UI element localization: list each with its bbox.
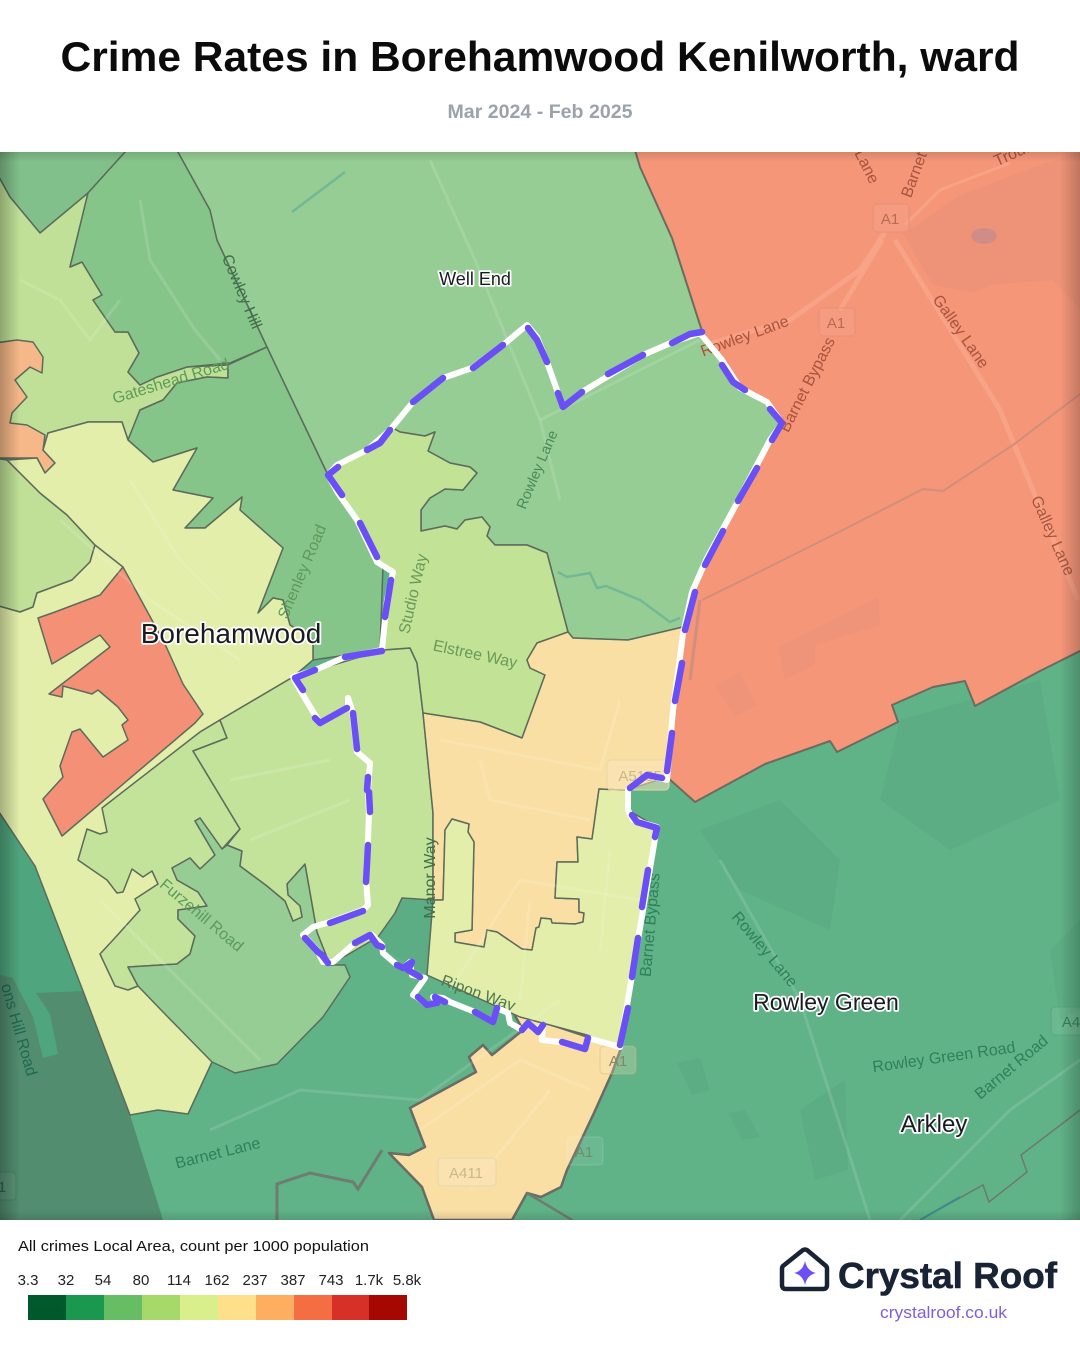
road labels: green areas: Manor Way	[422, 837, 439, 919]
road labels: green areas: Rowley Lane	[728, 909, 801, 991]
legend scale labels: 32	[58, 1272, 74, 1289]
area: Borehamwood light yellow-green	[0, 422, 313, 1115]
road labels: green areas: Barnet Bypass	[638, 872, 664, 978]
detail: district boundary	[920, 1110, 1080, 1220]
legend scale labels	[18, 1272, 422, 1289]
road labels: green areas: Barnet Road	[972, 1032, 1052, 1103]
road labels: green areas: Rowley Green Road	[871, 1039, 1016, 1076]
place labels: Well End	[439, 269, 511, 289]
icon: house with star	[782, 1250, 827, 1289]
area: north-west corner green	[0, 152, 124, 232]
area: Furzehill green	[128, 818, 350, 1073]
area: west mid green strip	[0, 458, 95, 612]
date range subtitle: Mar 2024 - Feb 2025	[448, 102, 633, 123]
place labels: Rowley Green	[753, 989, 899, 1015]
area: east high crime red	[632, 140, 1080, 802]
road labels: green areas: Studio Way	[396, 552, 431, 635]
place labels: Arkley	[901, 1111, 967, 1138]
area: south-west lowest crime	[0, 975, 163, 1220]
road labels: red area: Barnet Bypass	[777, 335, 839, 435]
road labels: red area: Lane	[851, 147, 882, 187]
road labels: green areas: Gateshead Road	[111, 356, 231, 408]
legend	[18, 1238, 422, 1320]
area: north-west mid green	[0, 170, 228, 458]
legend scale labels: 162	[204, 1272, 230, 1289]
road labels: red area: Barnet	[899, 149, 931, 200]
legend scale labels: 54	[95, 1272, 111, 1289]
road shields: A1	[609, 1053, 627, 1070]
legend scale labels: 743	[318, 1272, 344, 1289]
road labels: green areas: Cowley Hill	[218, 252, 265, 332]
detail: red area features	[690, 150, 1080, 717]
legend title: All crimes Local Area, count per 1000 population	[18, 1238, 369, 1255]
area: west mid green south of red	[78, 720, 240, 990]
road labels: green areas	[0, 252, 1052, 1173]
area: north low crime green	[172, 140, 782, 640]
detail: minor roads	[20, 160, 1080, 1220]
road shields: A411	[449, 1165, 483, 1182]
road labels: green areas: Shenley Road	[275, 522, 330, 621]
ward boundary: white base line	[293, 325, 782, 1049]
legend scale labels: 114	[167, 1272, 191, 1289]
area: orange high crime patch	[0, 340, 55, 473]
road shields	[0, 204, 1080, 1200]
area: central west mid green	[193, 648, 433, 965]
area: Cowley Hill north	[70, 140, 267, 385]
area: south-west low crime band	[0, 816, 82, 1058]
place labels	[141, 269, 967, 1138]
road shields: A4	[1062, 1014, 1080, 1031]
area: south yellow	[389, 1012, 621, 1220]
legend scale labels: 237	[242, 1272, 268, 1289]
legend colour bar	[28, 1295, 407, 1320]
detail: boundary to red area	[95, 545, 123, 567]
road labels: red area: Trout	[992, 139, 1033, 170]
area: Cowley Hill south	[125, 347, 383, 660]
legend scale labels: 5.8k	[393, 1272, 422, 1289]
road shields: A1	[881, 211, 899, 228]
road labels: green areas: Rowley Lane	[514, 428, 562, 512]
legend scale labels: 80	[133, 1272, 149, 1289]
road labels: green areas: Barnet Lane	[174, 1135, 262, 1173]
road labels: red area: Galley Lane	[929, 292, 992, 372]
area: west high crime red	[38, 567, 203, 836]
map base: low crime dark green	[3, 364, 1080, 1220]
place labels: Borehamwood	[141, 618, 321, 649]
road labels: green areas: Furzehill Road	[156, 876, 246, 955]
road shields: A5135	[618, 768, 662, 785]
road labels: green areas: Ripon Way	[439, 972, 517, 1015]
detail: district boundary thick	[277, 1150, 382, 1220]
title: Crime Rates in Borehamwood Kenilworth, ward	[60, 33, 1020, 80]
road labels: red area: Galley Lane	[1027, 493, 1077, 578]
road shields: A1	[575, 1144, 593, 1161]
detail: darker field patches in south-east	[378, 680, 1080, 1180]
logo: Crystal Roof	[782, 1250, 1058, 1322]
legend scale labels: 3.3	[18, 1272, 38, 1289]
map edge vignette	[0, 152, 1080, 1220]
legend scale labels: 387	[280, 1272, 306, 1289]
detail: watercourses	[292, 172, 680, 622]
road labels: red area: Rowley Lane	[699, 313, 791, 361]
legend scale labels: 1.7k	[355, 1272, 384, 1289]
road labels: green areas: Elstree Way	[431, 638, 519, 672]
road labels: red area	[699, 139, 1077, 578]
wordmark: Crystal Roof	[838, 1255, 1058, 1296]
website: crystalroof.co.uk	[880, 1303, 1008, 1322]
area: central light yellow-green	[427, 789, 657, 1047]
ward boundary: purple dashes	[295, 328, 782, 1049]
area: Elstree mid green	[328, 428, 568, 738]
area: central yellow	[423, 627, 683, 950]
road shields: A1	[827, 315, 845, 332]
